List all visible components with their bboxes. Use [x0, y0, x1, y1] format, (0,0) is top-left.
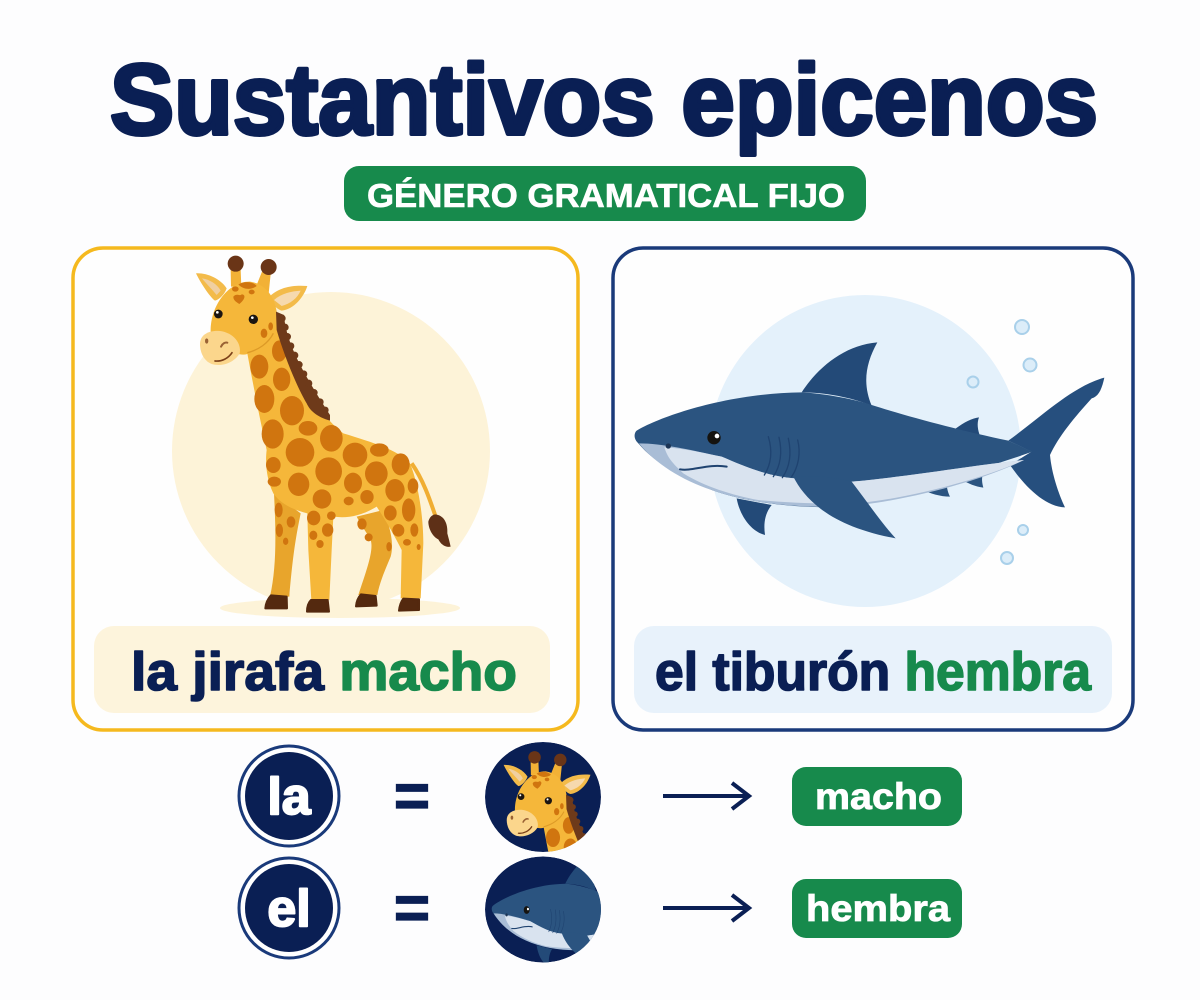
article badge: el: [239, 858, 339, 958]
avatar: giraffe head: [485, 742, 601, 852]
arrow: [663, 783, 749, 809]
article badge: la: la: [267, 768, 312, 826]
legend row: la: [238, 742, 962, 852]
subtitle badge: GÉNERO GRAMATICAL FIJO: [367, 177, 845, 214]
subtitle badge: [344, 166, 866, 221]
shark label: [634, 626, 1112, 713]
shark backdrop circle: [709, 295, 1021, 607]
arrow: [663, 895, 749, 921]
avatar: shark head: [485, 856, 601, 962]
giraffe backdrop circle: [172, 292, 490, 610]
illustration: shark: [635, 342, 1104, 538]
giraffe label: la jirafa macho: [131, 642, 517, 702]
bubbles: [968, 320, 1036, 564]
illustration: giraffe: [196, 256, 451, 612]
equals sign: =: [394, 762, 430, 831]
title: Sustantivos epicenos: [110, 44, 1098, 156]
legend row: el: [239, 855, 962, 968]
giraffe label: [94, 626, 550, 713]
result badge: macho: [792, 767, 962, 826]
article badge: la: [239, 746, 339, 846]
shark label: el tiburón hembra: [655, 642, 1092, 702]
panel: giraffe: [73, 248, 578, 730]
result badge: macho: macho: [815, 776, 942, 817]
equals sign: =: [394, 874, 430, 943]
result badge: hembra: hembra: [806, 888, 950, 929]
result badge: hembra: [792, 879, 962, 938]
article badge: el: el: [267, 880, 311, 938]
panel: shark: [613, 248, 1133, 730]
giraffe ground shadow: [220, 598, 460, 618]
